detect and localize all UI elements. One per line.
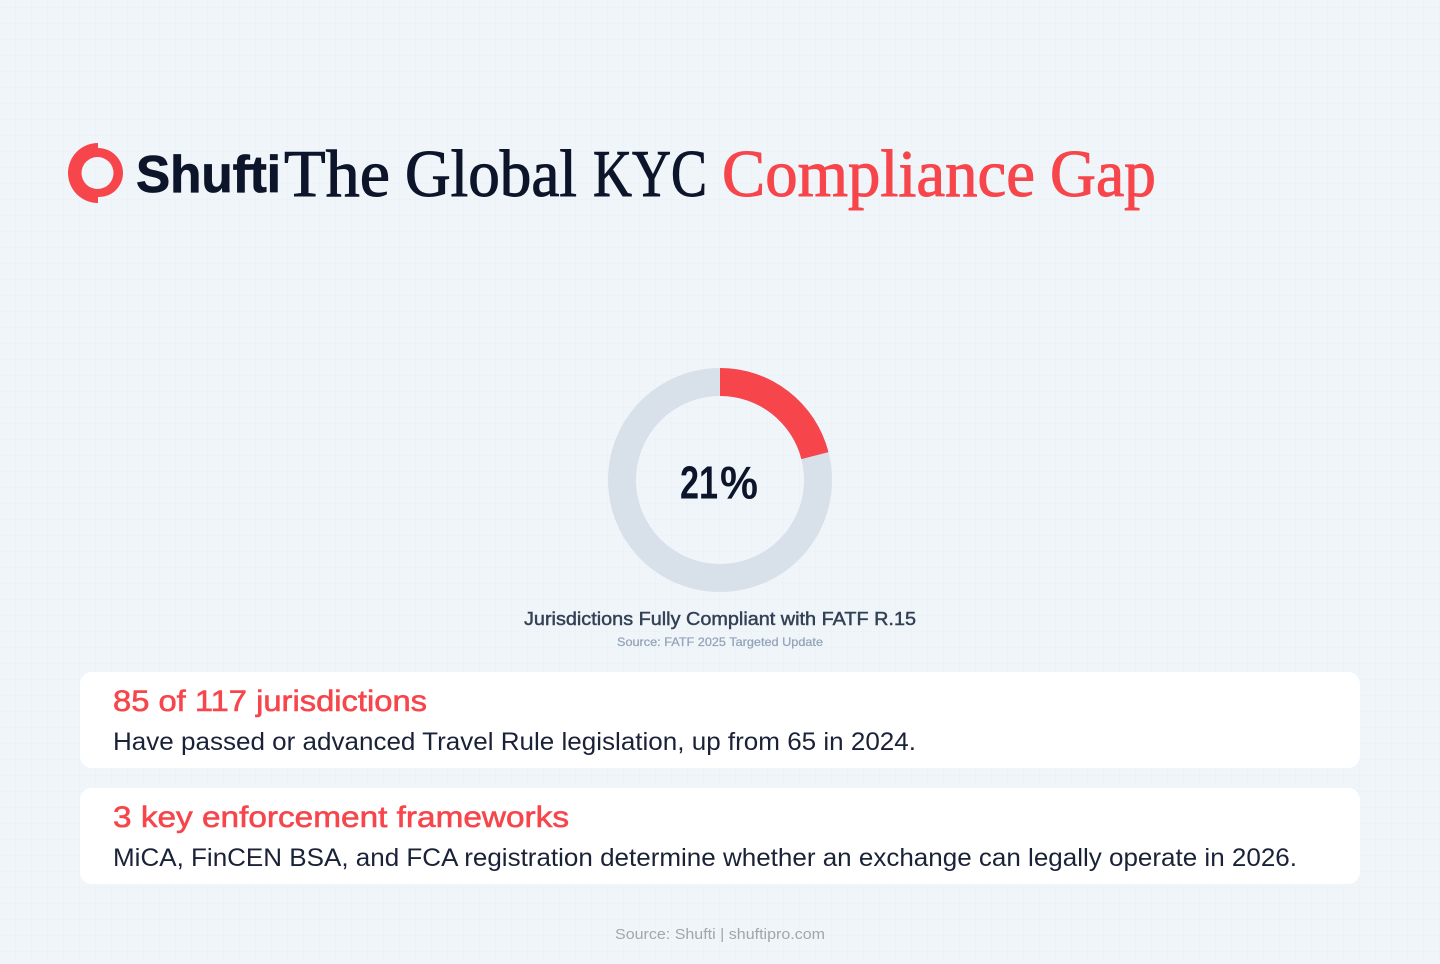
title <box>284 137 1156 211</box>
panel: enforcement frameworks stat <box>80 788 1360 884</box>
donut segment: 21% compliant <box>720 368 828 459</box>
icon: Shufti ring <box>68 143 123 203</box>
title: dark part: KYC <box>593 137 707 211</box>
donut value: 21 <box>680 456 718 508</box>
footer source: Source: Shufti | shuftipro.com <box>615 926 825 943</box>
stat description: MiCA, FinCEN BSA, and FCA registration determine whether an exchange can legally operate in 2026. <box>113 844 1297 872</box>
stat description: Have passed or advanced Travel Rule legislation, up from 65 in 2024. <box>113 728 916 756</box>
panel: Travel Rule stat <box>80 672 1360 768</box>
stat heading: 85 of 117 jurisdictions <box>113 685 427 718</box>
logo: Shufti <box>68 143 281 204</box>
chart source: Source: FATF 2025 Targeted Update <box>617 635 823 649</box>
logo wordmark: Shufti <box>136 146 281 204</box>
stat heading: 3 key enforcement frameworks <box>113 801 569 834</box>
donut value: % <box>720 456 758 508</box>
title: red part: Gap <box>1050 137 1156 211</box>
title: red part: Compliance <box>722 137 1035 211</box>
donut chart: 21% <box>622 368 828 578</box>
chart caption: Jurisdictions Fully Compliant with FATF R.15 <box>524 608 916 629</box>
title: dark part: Global <box>405 137 577 211</box>
title: dark part: The <box>284 137 390 211</box>
